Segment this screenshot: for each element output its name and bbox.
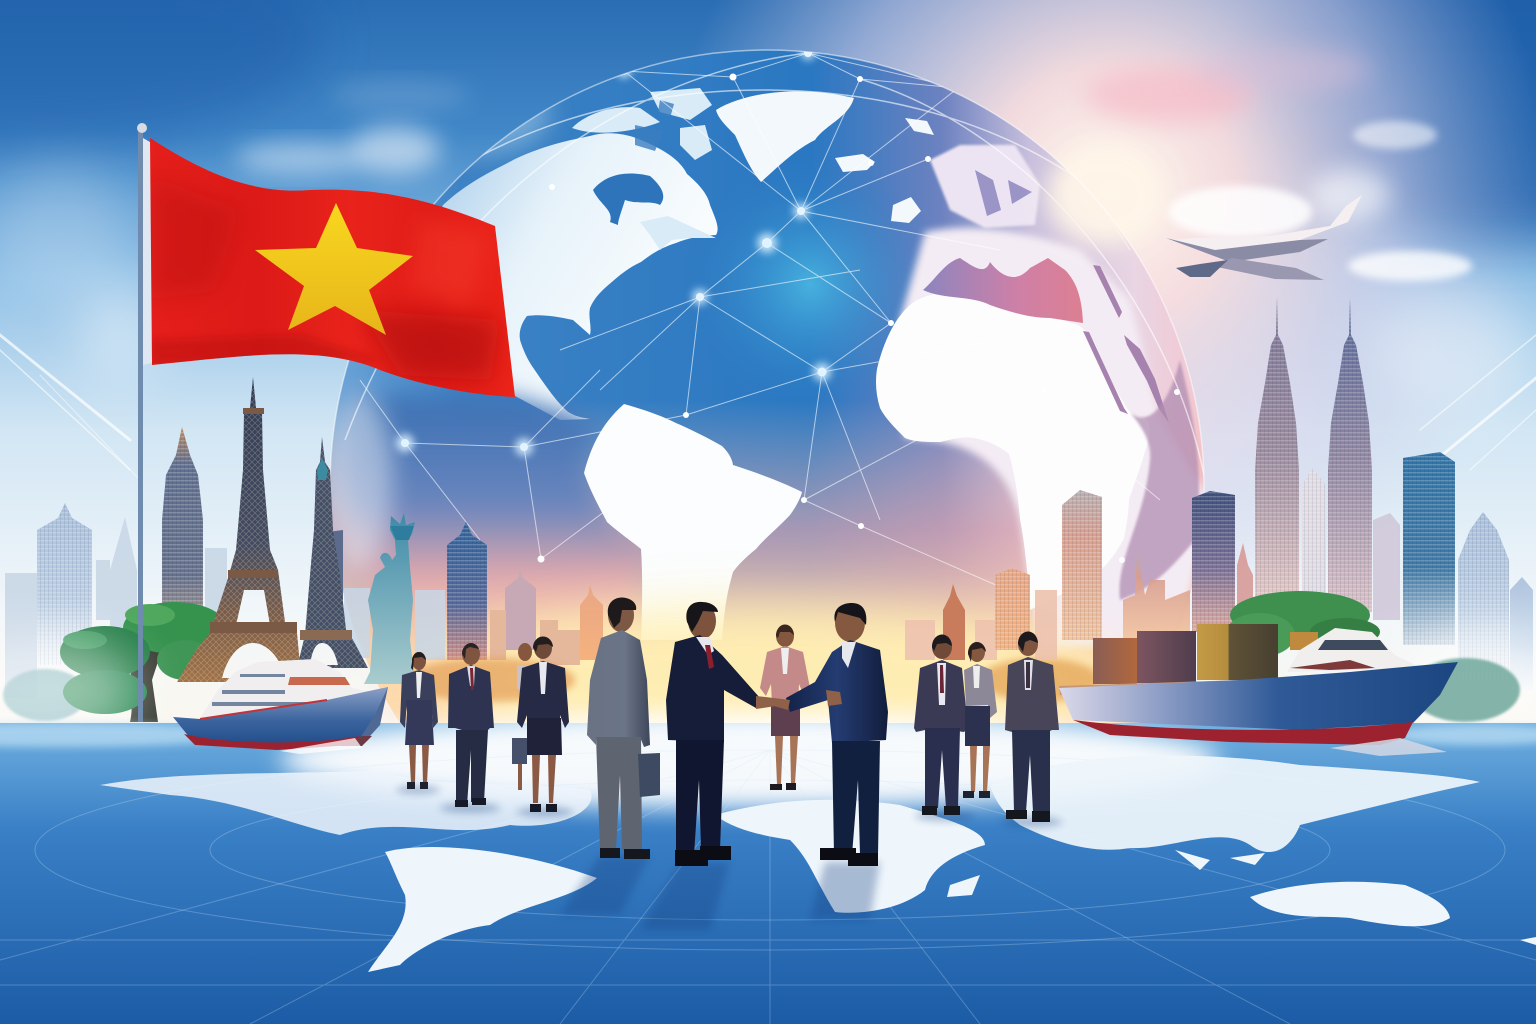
globe nodes: [401, 49, 1180, 563]
mist at right city base: [1410, 620, 1536, 740]
iceland and britain: [835, 118, 934, 223]
clouds: [0, 48, 1530, 410]
cruise ship left: [173, 659, 388, 754]
trees right: [1225, 591, 1520, 722]
floor grid lines: [0, 750, 1536, 1024]
airplane: [1166, 195, 1362, 280]
person: man 9: [914, 634, 968, 815]
briefcase: [638, 753, 660, 797]
continent: north america: [420, 133, 718, 420]
world globe: [330, 50, 1204, 723]
skyline: distant left buildings: [5, 517, 445, 698]
person: woman 1: [400, 652, 438, 789]
person: man 6 navy: [666, 602, 776, 866]
horizon glow over globe: [430, 605, 1110, 755]
globe network lines: [345, 53, 1205, 600]
mist at left city base: [0, 635, 140, 745]
vietnam flag: [143, 138, 515, 397]
containers: [1093, 624, 1278, 684]
globe rim: [330, 50, 1204, 924]
warm trees behind people right: [980, 658, 1100, 702]
handbag: [512, 738, 527, 764]
person: background woman 3: [512, 643, 532, 790]
globe left haze: [328, 390, 392, 570]
skyline: dark building behind eiffel: [328, 530, 343, 600]
person: man 8 navy: [774, 603, 888, 866]
people shadows: [396, 786, 1062, 930]
red sea and arabia lines: [1083, 265, 1169, 423]
pale eastern hemisphere: [900, 228, 1210, 650]
person: man 5 back view: [587, 598, 660, 859]
africa white: [876, 292, 1150, 610]
eiffel tower small: [297, 437, 368, 668]
light rays: [0, 335, 1536, 480]
statue of liberty: [364, 513, 420, 684]
eiffel tower large: [177, 377, 315, 682]
person: man 11: [1005, 631, 1059, 822]
greenland: [716, 91, 854, 182]
trees left: [3, 602, 227, 722]
pacific ocean region: [345, 395, 641, 650]
cruise ship hull: [173, 687, 388, 747]
sun flare: [1047, 145, 1163, 245]
skyline: right towers: [943, 297, 1509, 680]
indian ocean land: [1119, 360, 1199, 600]
arctic islands: [572, 88, 716, 250]
skyline: left towers: [37, 427, 603, 665]
person: woman 4: [517, 636, 569, 812]
person: woman 10: [963, 642, 997, 798]
person: man 2: [448, 643, 494, 807]
flag fold shading: [150, 175, 500, 380]
skyline: right distant buildings: [905, 513, 1533, 690]
south america white: [584, 404, 802, 640]
person: woman 7 pink: [760, 624, 810, 790]
floor: [0, 712, 1536, 1024]
floor continents: [100, 755, 1536, 972]
cargo ship right: [1059, 624, 1458, 756]
flag star: [255, 203, 413, 335]
hudson bay: [593, 174, 663, 225]
flag pole: [137, 123, 147, 722]
europe pale land: [930, 145, 1040, 228]
warm trees behind people left: [405, 658, 575, 702]
mediterranean land: [923, 258, 1083, 323]
node glows: [396, 46, 831, 456]
